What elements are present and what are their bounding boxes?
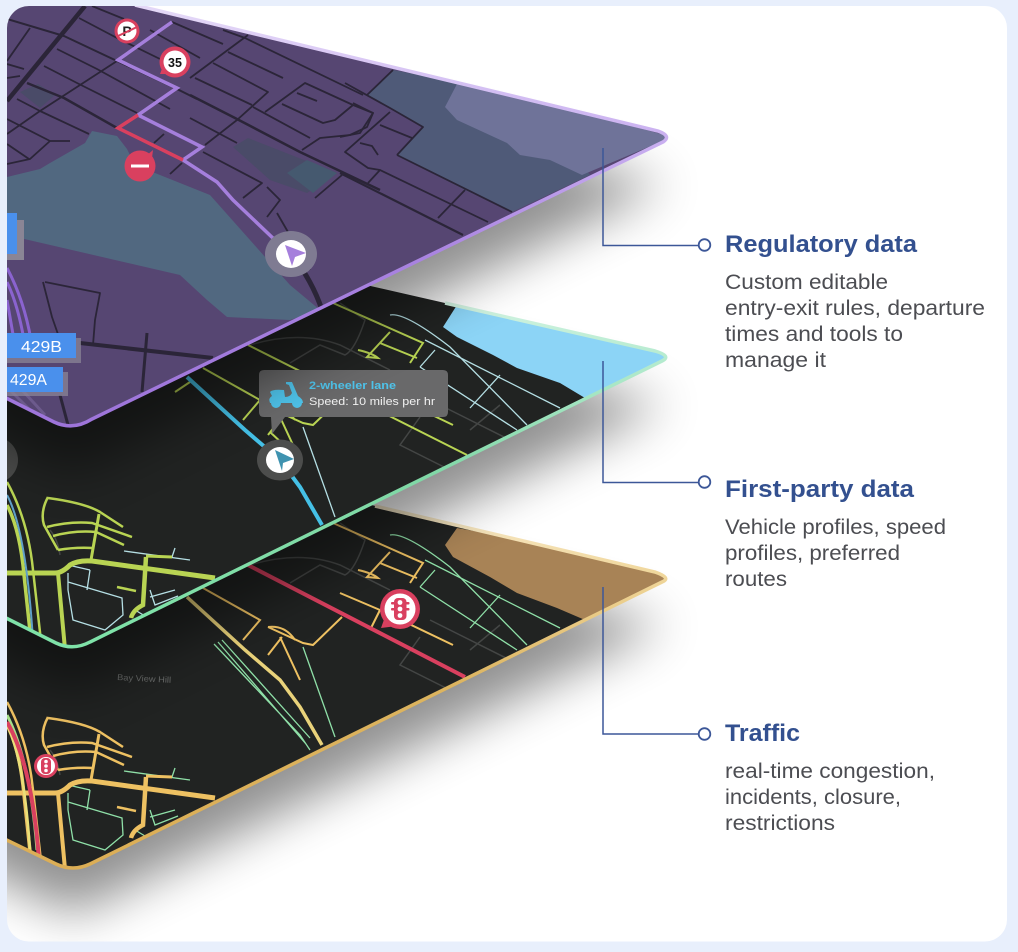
callout: 2-wheeler lane <box>259 370 448 434</box>
water: lake <box>7 131 320 320</box>
icon: no parking: P <box>122 23 132 39</box>
text block: first-party <box>725 476 946 591</box>
connector: traffic <box>603 587 710 740</box>
route: purple <box>118 22 277 242</box>
water: small pond <box>20 84 55 108</box>
shadow: traffic layer <box>0 560 665 914</box>
exit tag 429B: 429B <box>21 339 62 356</box>
street grid <box>7 6 512 425</box>
text block: traffic: real-time congestion, <box>725 760 935 783</box>
callout: 2-wheeler lane: 2-wheeler lane <box>309 380 396 392</box>
text block: first-party: Vehicle profiles, speed <box>725 516 946 539</box>
text block: traffic: Traffic <box>725 720 800 747</box>
exit tag 429A: 429A <box>10 372 48 389</box>
icon: navigation marker purple <box>265 231 317 277</box>
text block: regulatory: Custom editable <box>725 271 888 294</box>
water: bay dark <box>367 70 590 212</box>
text block: regulatory: Regulatory data <box>725 231 918 258</box>
highway strands <box>7 268 45 415</box>
callout: 2-wheeler lane: Speed: 10 miles per hr <box>309 396 435 408</box>
congested highway <box>7 722 39 860</box>
connector: first-party <box>603 361 710 488</box>
icon: speed limit 35: 35 <box>168 56 182 70</box>
exit tag 429B <box>7 333 81 363</box>
icon: closure marker <box>124 150 156 182</box>
text block: traffic <box>725 720 935 835</box>
shadow: regulatory layer <box>7 151 670 465</box>
text block: first-party: routes <box>725 568 787 591</box>
icon: navigation marker teal <box>257 440 303 480</box>
icon: traffic light pin <box>380 589 420 629</box>
text block: traffic: restrictions <box>725 812 835 835</box>
route: red closure <box>118 115 183 160</box>
map label: Bay View Hill <box>117 672 171 685</box>
icon: scooter <box>269 382 303 408</box>
congested road <box>248 565 465 677</box>
text block: regulatory <box>725 231 985 372</box>
route: 2-wheeler lane <box>187 377 322 525</box>
water: first-party <box>443 305 670 398</box>
blue tag 1 behind <box>7 220 24 260</box>
connector: regulatory <box>603 148 710 251</box>
exit tag 429A <box>7 367 68 396</box>
water: park <box>234 138 310 193</box>
icon: small traffic pin <box>34 754 58 778</box>
blue tag 1 <box>7 213 17 254</box>
text block: regulatory: entry-exit rules, departure <box>725 297 985 320</box>
nav halo sliver <box>7 440 18 480</box>
text block: first-party: profiles, preferred <box>725 542 900 565</box>
text block: first-party: First-party data <box>725 476 915 503</box>
shadow: first-party layer <box>7 370 670 683</box>
water: traffic <box>445 528 670 620</box>
text block: traffic: incidents, closure, <box>725 786 901 809</box>
icon: speed limit 35 <box>160 46 190 78</box>
water: bay light <box>445 80 672 175</box>
icon: no parking <box>114 18 140 44</box>
panel: first-party layer <box>7 286 668 648</box>
text block: regulatory: times and tools to <box>725 323 903 346</box>
text block: regulatory: manage it <box>725 349 826 372</box>
panel: regulatory layer <box>0 0 680 440</box>
panel: traffic layer <box>7 504 668 870</box>
